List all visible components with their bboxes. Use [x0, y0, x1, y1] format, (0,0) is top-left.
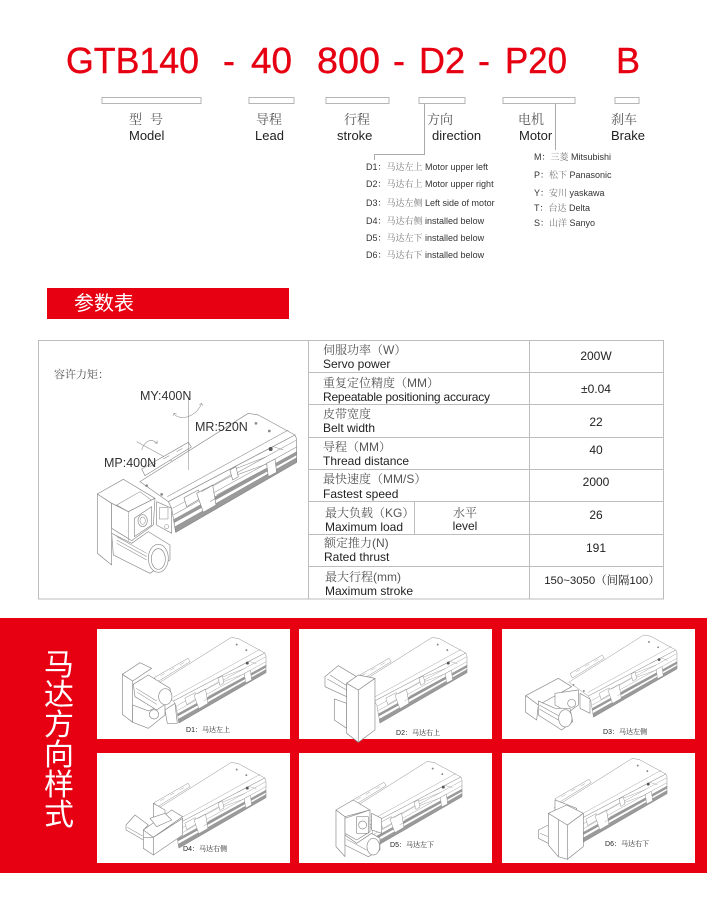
- table row labels: 导程（MM）: [323, 440, 391, 454]
- vertical heading: 式: [44, 799, 74, 832]
- table row labels: Servo power: [323, 357, 390, 371]
- panel: D2: D2：马达右上: [396, 728, 440, 737]
- table row labels: 最大行程(mm): [325, 569, 401, 584]
- table row labels: 额定推力(N): [324, 535, 389, 550]
- moment values: MP:400N: [104, 456, 156, 470]
- vertical heading: 马: [44, 649, 74, 682]
- table row labels: Maximum load: [325, 520, 403, 534]
- moment values: [104, 389, 248, 470]
- table values: 191: [586, 541, 606, 555]
- table row labels: Thread distance: [323, 454, 409, 468]
- actuator drawing with moment axes: [97, 398, 297, 573]
- segment labels: Lead: [255, 128, 284, 143]
- allowable moment label: 容许力矩：: [54, 367, 109, 381]
- moment values: MR:520N: [195, 420, 248, 434]
- segment labels: 刹车: [611, 112, 637, 127]
- code segment boxes: [102, 98, 639, 104]
- model code title: -: [223, 40, 235, 81]
- vertical heading: 样: [44, 769, 74, 802]
- panel: D5: [299, 753, 492, 863]
- table row labels: level: [453, 519, 477, 533]
- vertical heading: 达: [44, 679, 74, 712]
- model code title: 40: [251, 40, 292, 81]
- panel: D4: D4：马达右侧: [183, 844, 227, 853]
- table row labels: Maximum stroke: [325, 584, 413, 598]
- table row labels: Repeatable positioning accuracy: [323, 390, 490, 404]
- table row labels: Belt width: [323, 421, 375, 435]
- section heading: parameter table: 参数表: [74, 292, 134, 315]
- panel: D4: [97, 753, 290, 863]
- leader lines: [374, 104, 556, 160]
- table values: 22: [589, 415, 603, 429]
- table row labels: 伺服功率（W）: [323, 342, 406, 357]
- model code title: D2: [419, 40, 465, 81]
- model code title: GTB140: [66, 40, 199, 81]
- segment labels: [129, 112, 645, 143]
- direction options list: D5：马达左下 installed below: [366, 232, 485, 243]
- table row labels: Rated thrust: [324, 550, 390, 564]
- model code title: [66, 40, 640, 81]
- model code title: B: [616, 40, 640, 81]
- segment labels: 行程: [344, 112, 370, 127]
- motor assembly: [97, 479, 172, 573]
- table row labels: [323, 342, 490, 598]
- panel: motor direction styles background: [0, 618, 707, 873]
- vertical heading: 向: [44, 739, 74, 772]
- panel: D5: D5：马达左下: [390, 840, 434, 849]
- moment values: MY:400N: [140, 389, 191, 403]
- motor brand list: S：山洋 Sanyo: [534, 217, 595, 228]
- table row labels: 最快速度（MM/S）: [323, 471, 426, 486]
- table row labels: 重复定位精度（MM）: [323, 375, 439, 390]
- table values: 150~3050（间隔100）: [544, 573, 660, 587]
- table values: ±0.04: [581, 382, 611, 396]
- segment labels: 导程: [256, 112, 282, 127]
- segment labels: Motor: [519, 128, 553, 143]
- segment labels: 电机: [518, 112, 544, 127]
- segment labels: 方向: [427, 112, 453, 127]
- vertical heading: [44, 649, 74, 832]
- segment labels: 型: [129, 112, 142, 127]
- direction options list: [366, 161, 495, 260]
- moment axes and arrows: [137, 398, 250, 470]
- direction options list: D3：马达左侧 Left side of motor: [366, 197, 495, 208]
- direction options list: D6：马达右下 installed below: [366, 249, 485, 260]
- table row labels: 水平: [453, 505, 477, 520]
- panel: D6: [502, 753, 695, 863]
- panel: D1: [97, 629, 290, 739]
- motor brand list: Y：安川 yaskawa: [534, 187, 605, 198]
- table values: 200W: [580, 349, 612, 363]
- panel: D1: D1：马达左上: [186, 725, 230, 734]
- table values: 40: [589, 443, 603, 457]
- direction options list: D4：马达右侧 installed below: [366, 215, 485, 226]
- model code title: 800: [317, 40, 380, 81]
- model code title: P20: [505, 40, 567, 81]
- direction options list: D2：马达右上 Motor upper right: [366, 178, 494, 189]
- segment labels: direction: [432, 128, 481, 143]
- motor brand list: [534, 151, 612, 228]
- panel: D2: [299, 629, 492, 742]
- model code title: -: [478, 40, 490, 81]
- panel: D3: D3：马达左侧: [603, 727, 647, 736]
- section heading: parameter table: [47, 288, 289, 319]
- segment labels: Model: [129, 128, 165, 143]
- direction options list: D1：马达左上 Motor upper left: [366, 161, 489, 172]
- segment labels: Brake: [611, 128, 645, 143]
- table values: 26: [589, 508, 603, 522]
- table values: 2000: [583, 475, 610, 489]
- model code title: -: [393, 40, 405, 81]
- segment labels: 号: [150, 112, 163, 127]
- motor brand list: P：松下 Panasonic: [534, 169, 612, 180]
- table row labels: 最大负载（KG）: [325, 505, 414, 520]
- parameter table grid: [38, 340, 664, 599]
- panel: D6: D6：马达右下: [605, 839, 649, 848]
- table row labels: 皮带宽度: [323, 406, 371, 421]
- motor brand list: M：三菱 Mitsubishi: [534, 151, 611, 162]
- motor brand list: T：台达 Delta: [534, 202, 590, 213]
- segment labels: stroke: [337, 128, 372, 143]
- table values: [544, 349, 660, 587]
- vertical heading: 方: [44, 709, 74, 742]
- panel: D3: [502, 629, 695, 739]
- table row labels: Fastest speed: [323, 487, 398, 501]
